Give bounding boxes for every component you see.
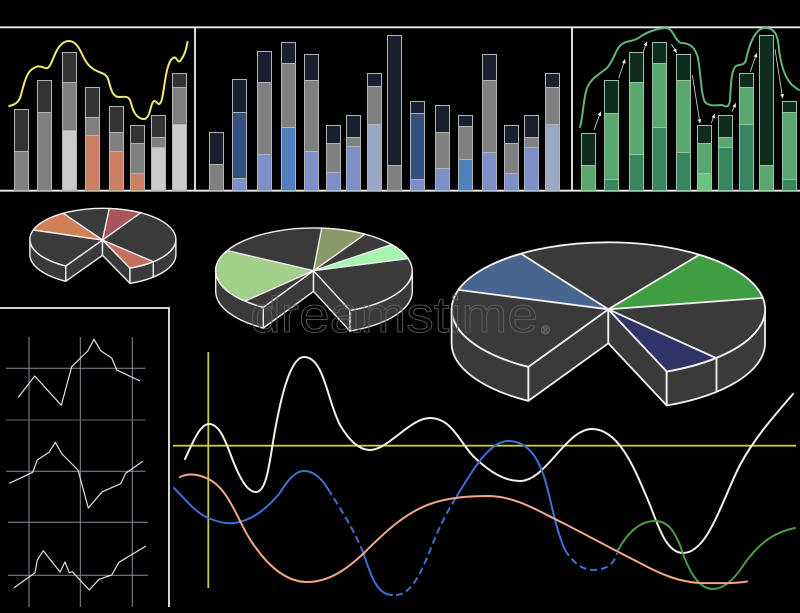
line chart: bottom sparkline [14,546,146,590]
panel frame: top bar chart row [0,27,800,191]
axes: yellow vertical and horizontal [173,352,796,588]
grid: small line charts [6,337,148,607]
line chart: middle sparkline [9,442,143,508]
curve: orange wave [180,474,747,583]
pie chart: large 3D pie with blue, green and navy slices [452,242,765,406]
bar chart: blue stacked bars [210,36,560,190]
trend line: yellow curve over grey bars [9,41,187,119]
pie chart: small 3D pie with orange and red slices [30,208,176,283]
curve: blue wave with dashed sections [174,441,617,595]
panel frame: small line charts [0,308,169,607]
watermark: dreamstime: dreamstime [250,287,538,343]
bar chart: grey and orange stacked bars [14,52,186,190]
bar chart: green stacked bars [582,36,796,190]
watermark: dreamstime: ® [541,323,550,337]
pie chart: medium 3D pie with green slices [216,228,412,331]
trend line: green curve over green bars [580,28,799,127]
arrows: small white arrows between green bars [594,42,783,130]
curve: green wave [618,521,795,589]
curve: white wave [185,357,793,553]
line chart: top sparkline [18,339,140,405]
